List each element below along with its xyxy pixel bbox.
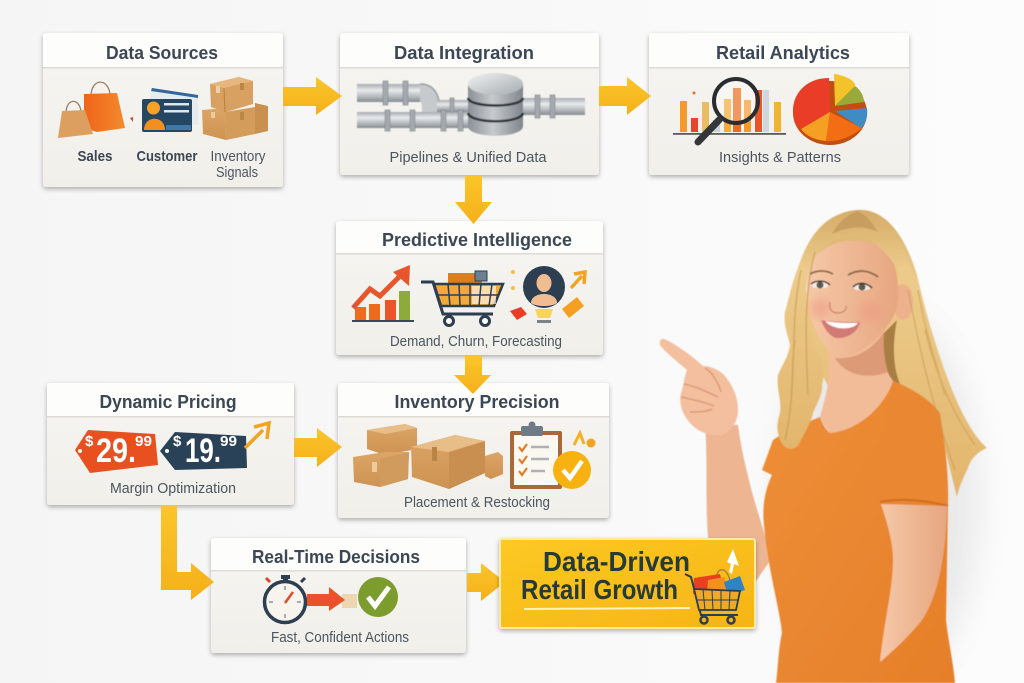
hand [660,339,738,435]
icon: stacked boxes [353,424,503,489]
caption: insights and patterns: Insights & Patterns [719,149,841,166]
arrow: dynamic pricing to real-time decisions [161,505,214,600]
label: inventory signals: Signals [216,164,258,181]
face [807,240,898,357]
panel: inventory precision [338,383,609,518]
arrow: predictive intelligence to inventory precision [454,356,491,394]
icon: red price tag [75,430,158,473]
caption: demand, churn, forecasting: Demand, Churn, Forecasting [390,333,562,350]
icon: navy price tag: $ [173,433,182,450]
icon: red price tag: 29. [96,432,136,470]
heading: dynamic pricing: Dynamic Pricing [100,392,236,412]
icon: red price tag: 99 [135,433,152,450]
heading: data-driven retail growth: Retail Growth [521,574,678,605]
eyes and brows [810,271,878,277]
caption: margin optimization: Margin Optimization [110,480,236,497]
icon: cart with bags [685,549,745,624]
heading: data-driven retail growth: Data-Driven [543,546,690,577]
panel: data sources [43,33,283,187]
icon: up arrow [245,423,269,448]
arrow: data sources to data integration [283,77,342,115]
arrow: data integration to predictive intelligence [455,176,492,224]
arrow: dynamic pricing to inventory precision [294,428,342,467]
panel: dynamic pricing [47,383,294,505]
caption: fast, confident actions: Fast, Confident Actions [271,629,409,646]
pointing arm [705,425,772,584]
panel: real-time decisions [211,538,466,653]
icon: shopping bags [58,82,133,138]
label: customer: Customer [136,148,198,165]
panel: retail analytics [649,33,909,175]
label: inventory signals: Inventory [210,148,266,165]
icon: navy price tag [160,432,247,470]
heading: retail analytics: Retail Analytics [716,43,850,63]
icon: pipes and database [357,73,585,136]
heading: data sources: Data Sources [106,43,218,63]
icon: shopping cart [421,271,503,326]
neck and chest [820,330,893,433]
heading: predictive intelligence: Predictive Intelligence [382,230,572,250]
person pointing [660,210,987,683]
label: sales: Sales [78,148,112,165]
heading: data integration: Data Integration [394,43,534,63]
caption: placement and restocking: Placement & Restocking [404,494,550,511]
back hair [800,210,987,497]
panel: data integration [340,33,599,175]
icon: growth chart [352,265,414,322]
icon: navy price tag: 19. [185,432,221,470]
caption: pipelines and unified data: Pipelines & Unified Data [390,149,547,166]
front hair [777,210,914,449]
panel: predictive intelligence [336,221,603,355]
ear [893,284,913,320]
arrow: data integration to retail analytics [599,77,651,115]
bare arm [880,504,947,662]
heading: real-time decisions: Real-Time Decisions [252,547,420,567]
icon: green check [358,577,398,617]
heading: inventory precision: Inventory Precision [394,392,560,412]
icon: pie chart [793,74,867,145]
icon: customer card [142,88,198,132]
icon: stopwatch [264,575,306,622]
shirt [762,381,955,683]
icon: bar chart with magnifier [673,79,786,142]
panel: data-driven retail growth banner [500,539,755,628]
icon: red price tag: $ [85,433,94,450]
heading: data-driven retail growth [521,546,690,605]
arrow: real-time decisions to growth banner [467,563,505,601]
label: inventory signals [210,148,266,181]
icon: clipboard with checkmark [510,422,596,489]
mouth [821,320,860,338]
icon: idea bulb with person [510,266,585,323]
icon: red arrow [307,587,357,611]
icon: inventory boxes [202,77,268,140]
icon: navy price tag: 99 [220,433,237,450]
